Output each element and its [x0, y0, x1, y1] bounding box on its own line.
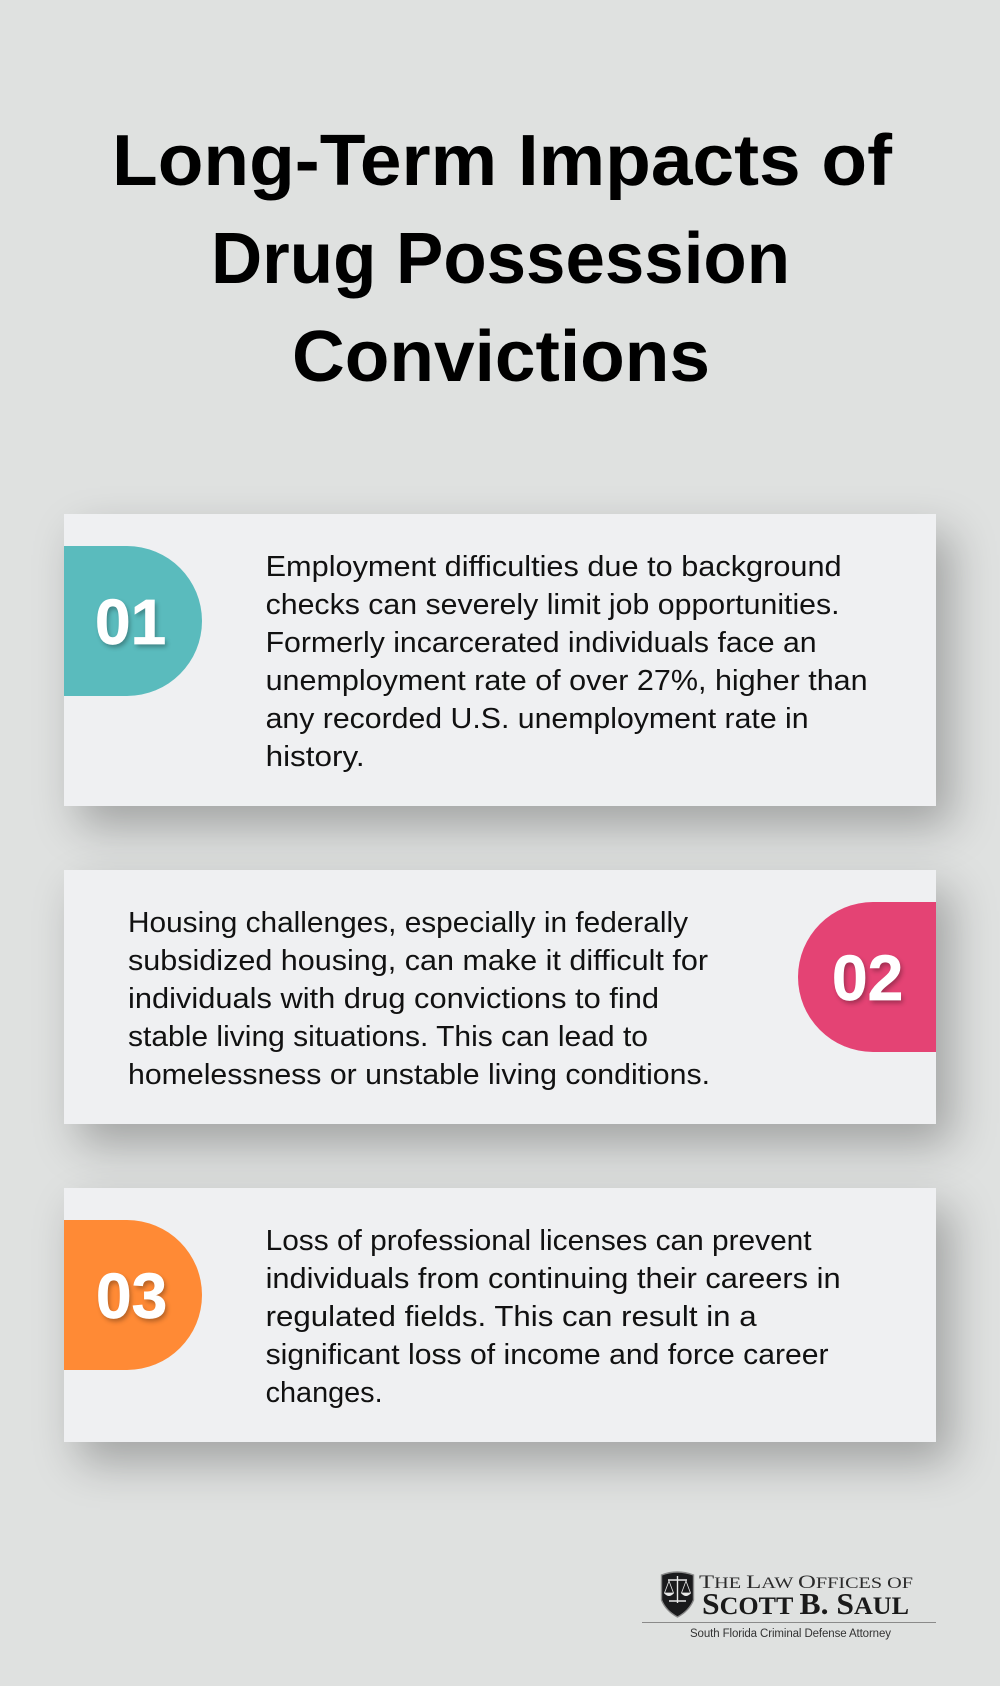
title: [112, 121, 893, 397]
logo divider: [642, 1622, 936, 1623]
title: Drug Possession: [211, 219, 790, 299]
text: licenses: regulated fields. This can result in a: [266, 1301, 757, 1333]
text: employment: any recorded U.S. unemployment rate in: [266, 703, 809, 735]
badge 03: [64, 1220, 202, 1370]
text: employment: checks can severely limit job opportunities.: [266, 589, 840, 621]
panel: housing challenges: [64, 870, 936, 1124]
panel: employment difficulties: [64, 514, 936, 806]
number 01: 01: [95, 586, 166, 658]
panel: professional licenses: [64, 1188, 936, 1442]
text: housing: [128, 907, 710, 1091]
title: Convictions: [292, 317, 710, 397]
text: employment: [266, 551, 868, 773]
badge 02: [798, 902, 936, 1052]
logo line one: THE LAW O FFICES OF: [699, 1572, 913, 1593]
title: Long-Term Impacts of: [112, 121, 893, 201]
text: housing: subsidized housing, can make it difficult for: [128, 945, 709, 977]
number 03: 03: [96, 1260, 167, 1332]
number 02: 02: [832, 942, 903, 1014]
text: licenses: [266, 1225, 841, 1409]
text: employment: Formerly incarcerated individuals face an: [266, 627, 817, 659]
text: licenses: Loss of professional licenses can prevent: [266, 1225, 812, 1257]
text: employment: unemployment rate of over 27%, higher than: [266, 665, 868, 697]
logo tagline: South Florida Criminal Defense Attorney: [690, 1628, 891, 1640]
text: housing: Housing challenges, especially in federally: [128, 907, 689, 939]
text: employment: Employment difficulties due to background: [266, 551, 842, 583]
logo line two: SCOTT B. SAUL: [702, 1586, 909, 1621]
text: licenses: changes.: [266, 1377, 383, 1409]
icon: shield with scales: [662, 1572, 694, 1617]
badge 01: [64, 546, 202, 696]
text: housing: stable living situations. This can lead to: [128, 1021, 648, 1053]
text: housing: homelessness or unstable living conditions.: [128, 1059, 710, 1091]
text: housing: individuals with drug convictions to find: [128, 983, 659, 1015]
text: licenses: individuals from continuing their careers in: [266, 1263, 841, 1295]
text: licenses: significant loss of income and force career: [266, 1339, 829, 1371]
text: employment: history.: [266, 741, 365, 773]
